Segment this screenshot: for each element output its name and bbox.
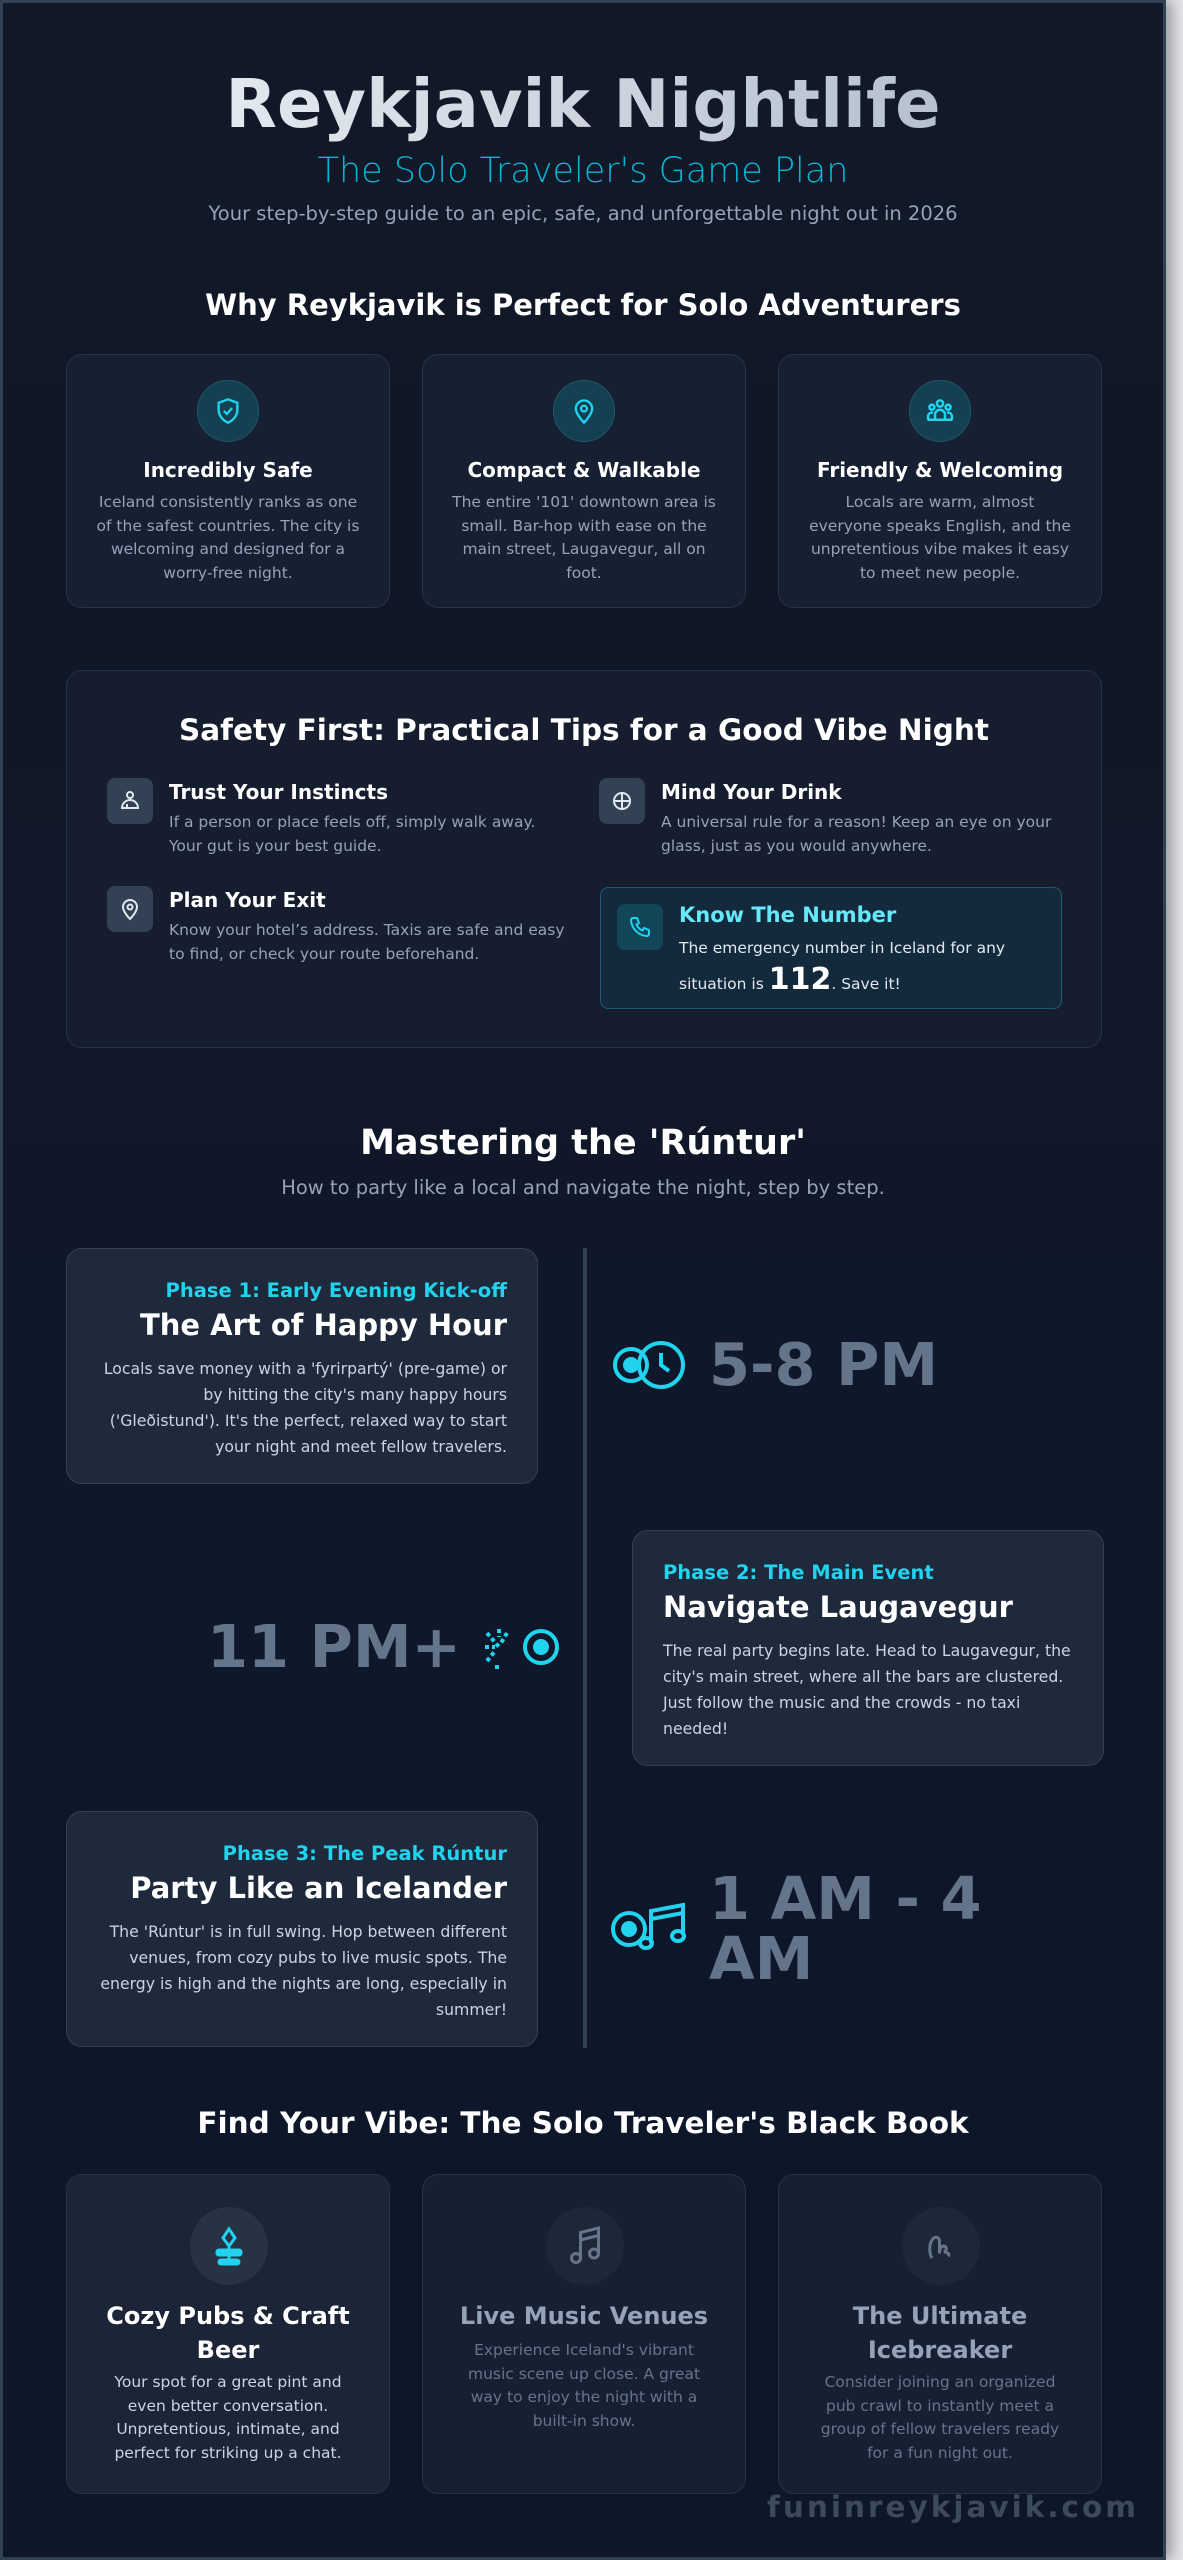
card: pubs: Your spot for a great pint and even better conversation. Unpretentious, intimate, and perfect for striking up a chat. — [114, 2373, 342, 2462]
tip: trust — [107, 778, 535, 855]
tip: drink — [599, 778, 1052, 855]
tagline: Your step-by-step guide to an epic, safe, and unforgettable night out in 2026 — [208, 202, 958, 225]
phase 1 card: The Art of Happy Hour — [140, 1308, 507, 1342]
card: compact: Compact & Walkable — [467, 458, 701, 482]
heading: mastering the runtur: Mastering the 'Rúntur' — [360, 1123, 806, 1163]
subheading: How to party like a local and navigate the night, step by step. — [281, 1176, 885, 1199]
icon: shield — [197, 380, 259, 442]
card: pubs — [66, 2174, 390, 2494]
icon: note — [546, 2207, 624, 2285]
callout: know the number — [600, 887, 1062, 1009]
card: live music: Experience Iceland's vibrant music scene up close. A great way to enjoy the night with a built-in show. — [468, 2341, 700, 2430]
timeline line — [583, 1248, 587, 2048]
title — [3, 59, 1163, 149]
card: friendly: Friendly & Welcoming — [817, 458, 1063, 482]
card: icebreaker: The Ultimate Icebreaker — [853, 2302, 1027, 2364]
phase 3 card: The 'Rúntur' is in full swing. Hop between different venues, from cozy pubs to live music spots. The energy is high and the nights are long, especially in summer! — [100, 1922, 507, 2019]
phase 2 card: Navigate Laugavegur — [663, 1590, 1013, 1624]
panel: safety — [66, 670, 1102, 1048]
callout: know the number: The emergency number in Iceland for any situation is 112. Save it! — [679, 939, 1005, 997]
phase 2 card: Phase 2: The Main Event — [663, 1561, 934, 1584]
card: compact: The entire '101' downtown area is small. Bar-hop with ease on the main street, Laugavegur, all on foot. — [452, 493, 716, 582]
phase 3 card: Party Like an Icelander — [130, 1871, 507, 1905]
icon: beer tap — [190, 2207, 268, 2285]
callout: know the number: Know The Number — [679, 903, 896, 927]
phase 1 card — [66, 1248, 538, 1484]
card: friendly — [778, 354, 1102, 608]
card: icebreaker — [778, 2174, 1102, 2494]
phase 1 card: Locals save money with a 'fyrirpartý' (pre-game) or by hitting the city's many happy hours ('Gleðistund'). It's the perfect, relaxed way to start your night and meet fellow travelers. — [104, 1359, 507, 1456]
card: live music: Live Music Venues — [460, 2302, 708, 2330]
card: compact — [422, 354, 746, 608]
icon: phone — [617, 904, 663, 950]
card: live music — [422, 2174, 746, 2494]
tip: exit: Know your hotel’s address. Taxis are safe and easy to find, or check your route beforehand. — [169, 921, 564, 963]
icon: group — [909, 380, 971, 442]
heading: why reykjavik: Why Reykjavik is Perfect for Solo Adventurers — [205, 288, 961, 322]
heading: find your vibe: Find Your Vibe: The Solo Traveler's Black Book — [197, 2106, 969, 2140]
title: Reykjavik Nightlife — [225, 65, 941, 143]
phase 3 card — [66, 1811, 538, 2047]
tip: trust: Trust Your Instincts — [169, 780, 388, 804]
card: incredibly safe: Incredibly Safe — [143, 458, 313, 482]
tip: exit: Plan Your Exit — [169, 888, 326, 912]
card: icebreaker: Consider joining an organized pub crawl to instantly meet a group of fellow travelers ready for a fun night out. — [821, 2373, 1059, 2462]
time: 1 AM - 4 AM: 1 AM - 4 AM — [709, 1864, 982, 1993]
card: pubs: Cozy Pubs & Craft Beer — [106, 2302, 350, 2364]
phase 2 card — [632, 1530, 1104, 1766]
heading: safety: Safety First: Practical Tips for a Good Vibe Night — [179, 713, 989, 747]
card: incredibly safe: Iceland consistently ranks as one of the safest countries. The city is welcoming and designed for a worry-free night. — [97, 493, 359, 582]
phase 2 card: The real party begins late. Head to Laugavegur, the city's main street, where all the bars are clustered. Just follow the music and the crowds - no taxi needed! — [663, 1641, 1071, 1738]
watermark: funinreykjavik.com — [767, 2490, 1139, 2524]
icon: hand — [902, 2207, 980, 2285]
time: 11 PM+: 11 PM+ — [207, 1612, 461, 1681]
tip: trust: If a person or place feels off, simply walk away. Your gut is your best guide. — [169, 813, 535, 855]
icon: music — [611, 1902, 686, 1950]
time: 5-8 PM: 5-8 PM — [709, 1330, 938, 1399]
tip: drink: A universal rule for a reason! Keep an eye on your glass, just as you would anywhere. — [661, 813, 1051, 855]
icon: clock — [613, 1341, 685, 1389]
tip: drink: Mind Your Drink — [661, 780, 842, 804]
tip: exit — [107, 886, 564, 963]
card: incredibly safe — [66, 354, 390, 608]
phase 1 card: Phase 1: Early Evening Kick-off — [166, 1279, 507, 1302]
subtitle: The Solo Traveler's Game Plan — [318, 151, 848, 191]
icon: party — [485, 1629, 559, 1669]
phase 3 card: Phase 3: The Peak Rúntur — [223, 1842, 507, 1865]
icon: pin — [553, 380, 615, 442]
card: friendly: Locals are warm, almost everyone speaks English, and the unpretentious vibe makes it easy to meet new people. — [809, 493, 1071, 582]
